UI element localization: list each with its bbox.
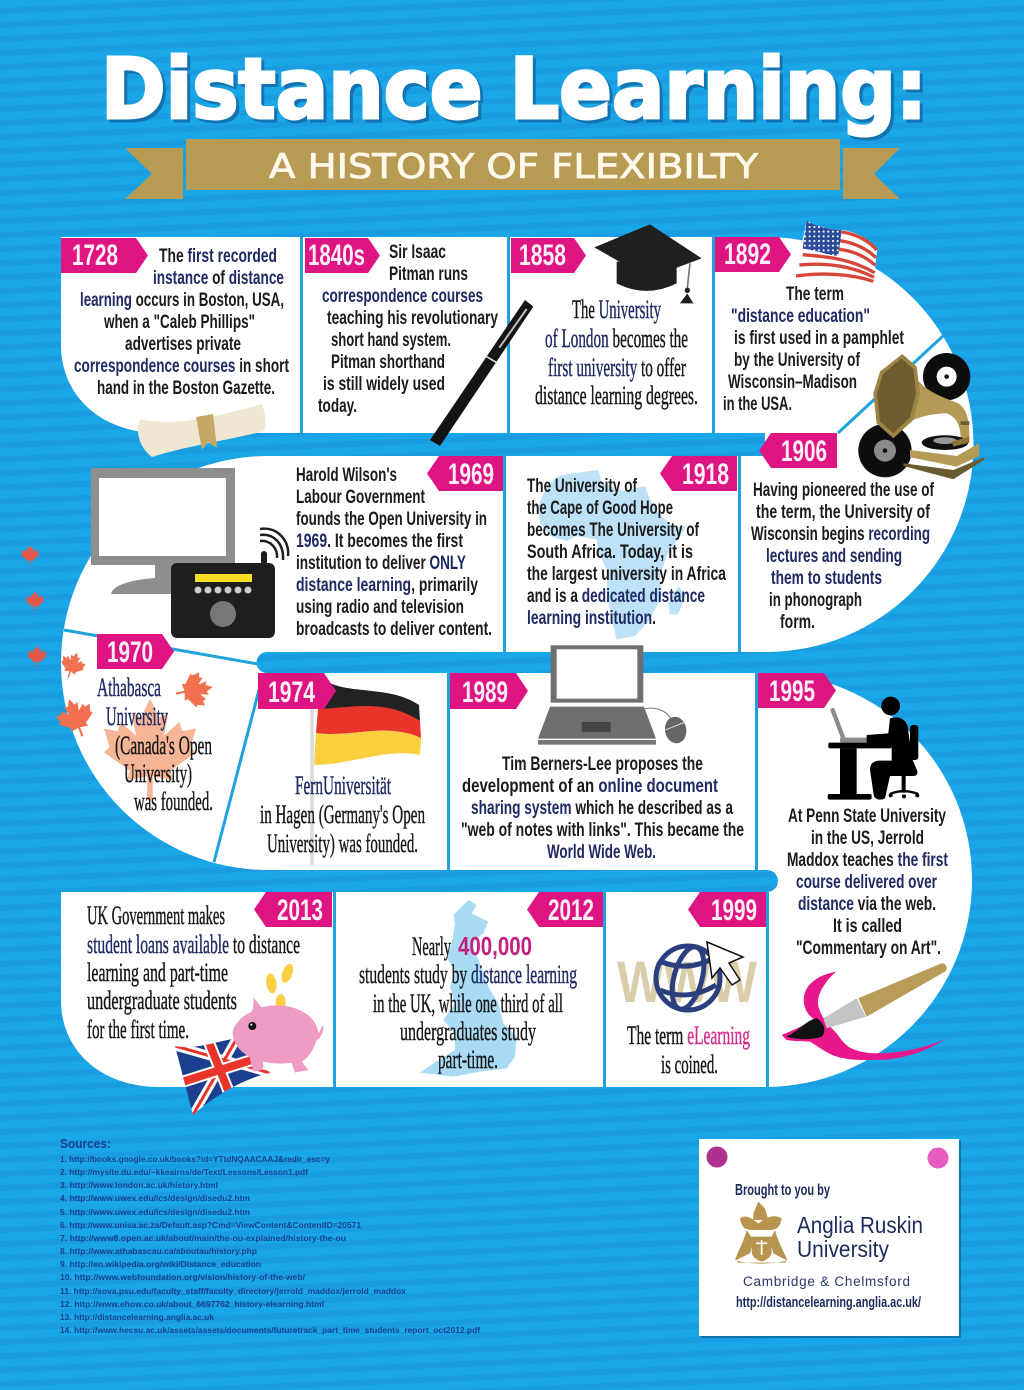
sources list: 3. http://www.london.ac.uk/history.html — [60, 1180, 218, 1190]
panel: 1728 — [61, 238, 289, 457]
icon: pen — [430, 300, 533, 446]
year tag: 1728 — [72, 239, 118, 272]
text: first university to offer — [548, 353, 686, 382]
text: distance learning degrees. — [535, 381, 698, 410]
text: in the UK, while one third of all — [373, 989, 563, 1018]
icon: piggy bank and coins — [233, 962, 323, 1073]
text: institution to deliver ONLY — [296, 553, 466, 574]
sponsor line: Brought to you by — [735, 1182, 830, 1199]
text — [296, 465, 492, 640]
text: advertises private — [125, 334, 241, 355]
text — [787, 806, 948, 959]
text: form. — [780, 612, 815, 633]
year tag: 2012 — [548, 894, 594, 927]
text: World Wide Web. — [547, 842, 656, 863]
icon: university crest — [735, 1202, 787, 1264]
text: The first recorded — [159, 246, 277, 267]
text — [260, 771, 425, 858]
text: correspondence courses in short — [74, 356, 289, 377]
text: distance learning, primarily — [296, 575, 478, 596]
text: Having pioneered the use of — [753, 480, 934, 501]
sources list: 7. http://www8.open.ac.uk/about/main/the-ou-explained/history-the-ou — [60, 1233, 346, 1243]
text: lectures and sending — [766, 546, 902, 567]
text: University — [106, 702, 168, 731]
text: in phonograph — [769, 590, 862, 611]
text: was founded. — [134, 787, 213, 816]
icon: person at desk — [828, 697, 919, 800]
text — [535, 295, 698, 410]
text: today. — [318, 396, 357, 417]
text — [87, 901, 300, 1044]
year tag: 1969 — [448, 458, 494, 491]
text: development of an online document — [462, 776, 719, 797]
text: hand in the Boston Gazette. — [97, 378, 275, 399]
text: South Africa. Today, it is — [527, 542, 693, 563]
text: in the USA. — [723, 394, 792, 415]
text — [461, 754, 744, 863]
text: the term, the University of — [756, 502, 930, 523]
icon: UK map — [420, 900, 517, 1077]
icon: US flag — [795, 221, 877, 283]
text: broadcasts to deliver content. — [296, 619, 492, 640]
year tag: 1906 — [781, 435, 827, 468]
panel: 1858 — [511, 224, 702, 410]
icon: Africa map — [538, 470, 687, 639]
text: Wisconsin begins recording — [751, 524, 930, 545]
year tag: 1974 — [268, 676, 315, 709]
panel: 1840s — [305, 238, 533, 446]
text: the largest university in Africa — [527, 564, 726, 585]
text — [74, 246, 289, 399]
sources list: 6. http://www.unisa.ac.za/Default.asp?Cmd=ViewContent&ContentID=20571 — [60, 1220, 361, 1230]
year tag — [660, 456, 737, 491]
text: learning occurs in Boston, USA, — [80, 290, 284, 311]
text: Pitman runs — [389, 264, 468, 285]
year tag: 2013 — [277, 894, 323, 927]
text: correspondence courses — [322, 286, 483, 307]
year tag: 1999 — [711, 894, 757, 927]
text: 1969. It becomes the first — [296, 531, 463, 552]
sources list — [60, 1136, 480, 1335]
year tag — [759, 433, 837, 468]
panel: 1999 — [617, 892, 766, 1079]
text: students study by distance learning — [359, 960, 577, 989]
icon: German flag — [310, 680, 421, 865]
text: them to students — [771, 568, 882, 589]
text: (Canada's Open — [115, 731, 212, 760]
panel: brought to you by note — [699, 1139, 961, 1338]
text — [751, 480, 934, 633]
text: The University — [572, 295, 661, 324]
text: Athabasca — [97, 673, 161, 702]
icon: union flag — [175, 1038, 270, 1115]
icon: graduation cap — [594, 224, 702, 303]
year tag: 1858 — [519, 239, 566, 272]
website url: http://distancelearning.anglia.ac.uk/ — [736, 1294, 922, 1311]
text: instance of distance — [153, 268, 284, 289]
panel: 1970 — [21, 545, 216, 816]
year tag — [427, 456, 503, 491]
panel: 2012 — [359, 892, 603, 1077]
panel: 1906 — [751, 353, 984, 633]
year tag — [688, 892, 766, 927]
text — [627, 1021, 750, 1079]
text: part-time. — [438, 1045, 498, 1074]
text: when a "Caleb Phillips" — [103, 312, 255, 333]
text: "Commentary on Art". — [796, 938, 941, 959]
sources list: Sources: — [60, 1136, 111, 1151]
icon: WWW globe and cursor: WWW — [617, 950, 757, 1015]
text: short hand system. — [331, 330, 451, 351]
text: undergraduate students — [87, 986, 237, 1015]
text: for the first time. — [87, 1015, 189, 1044]
year tag — [254, 892, 332, 927]
panel: 2013 — [87, 892, 332, 1115]
sources list: 10. http://www.webfoundation.org/vision/history-of-the-web/ — [60, 1272, 306, 1282]
winding white timeline path — [61, 237, 974, 1087]
panel: 1974 — [258, 673, 425, 865]
university name: University — [797, 1236, 889, 1262]
text: The term — [786, 284, 844, 305]
year tag — [527, 892, 603, 927]
text: UK Government makes — [87, 901, 225, 930]
text: learning and part-time — [87, 958, 228, 987]
sources list: 8. http://www.athabascau.ca/aboutau/history.php — [60, 1246, 257, 1256]
text: It is called — [833, 916, 902, 937]
year tag: 1989 — [462, 676, 508, 709]
panel: 1969 — [91, 456, 503, 640]
text: Pitman shorthand — [331, 352, 445, 373]
text: University) — [124, 759, 192, 788]
text: University) was founded. — [267, 829, 418, 858]
text: Harold Wilson's — [296, 465, 397, 486]
text: "distance education" — [731, 306, 870, 327]
text: Nearly — [412, 932, 451, 961]
text: in the US, Jerrold — [811, 828, 924, 849]
text: sharing system which he described as a — [471, 798, 733, 819]
text: Labour Government — [296, 487, 425, 508]
year tag: 1918 — [682, 458, 729, 491]
text — [723, 284, 904, 415]
text: Tim Berners-Lee proposes the — [502, 754, 703, 775]
icon: gramophone and records — [858, 353, 984, 479]
text: Maddox teaches the first — [787, 850, 948, 871]
text — [97, 673, 213, 816]
panel: 1995 — [758, 673, 948, 1060]
year tag: 1892 — [724, 238, 771, 271]
text: The University of — [527, 476, 637, 497]
icon: radio — [171, 529, 288, 638]
year tag: 1840s — [308, 239, 365, 272]
text — [359, 931, 577, 1074]
sources list: 2. http://mysite.du.edu/~kkeairns/de/Text/Lessons/Lesson1.pdf — [60, 1167, 308, 1177]
text: founds the Open University in — [296, 509, 487, 530]
icon: pins — [706, 1146, 948, 1168]
year tag: 1970 — [107, 636, 153, 669]
text: the Cape of Good Hope — [527, 498, 673, 519]
sources list: 11. http://sova.psu.edu/faculty_staff/faculty_directory/jerrold_maddox/jerrold_maddox — [60, 1286, 406, 1296]
text: is coined. — [661, 1050, 718, 1079]
icon: paintbrush with pink stroke — [782, 963, 947, 1060]
icon: scroll — [138, 404, 265, 457]
icon: laptop and mouse — [538, 645, 688, 745]
text: learning institution. — [527, 608, 656, 629]
text: teaching his revolutionary — [327, 308, 498, 329]
subtitle ribbon: A HISTORY OF FLEXIBILTY — [269, 147, 758, 187]
sources list: 13. http://distancelearning.anglia.ac.uk — [60, 1312, 214, 1322]
text: in Hagen (Germany's Open — [260, 800, 425, 829]
text: The term eLearning — [627, 1021, 750, 1050]
icon: maple leaves — [21, 545, 216, 800]
text: course delivered over — [796, 872, 937, 893]
sources list: 14. http://www.hecsu.ac.uk/assets/assets/documents/futuretrack_part_time_students_report_oct2012.pdf — [60, 1325, 480, 1335]
text: of London becomes the — [545, 324, 688, 353]
text: and is a dedicated distance — [527, 586, 705, 607]
sources list: 1. http://books.google.co.uk/books?id=YTtdNQAACAAJ&redir_esc=y — [60, 1154, 330, 1164]
text: using radio and television — [296, 597, 464, 618]
panel: 1892 — [715, 221, 904, 415]
university name: Anglia Ruskin — [797, 1212, 923, 1238]
text — [527, 476, 726, 629]
text: 400,000 — [458, 931, 532, 961]
text: distance via the web. — [798, 894, 936, 915]
text: student loans available to distance — [87, 930, 300, 959]
panel: 1989 — [450, 645, 744, 863]
text: undergraduates study — [400, 1017, 536, 1046]
text: Sir Isaac — [389, 242, 446, 263]
text: is first used in a pamphlet — [734, 328, 904, 349]
text: Wisconsin–Madison — [728, 372, 857, 393]
text: is still widely used — [323, 374, 445, 395]
icon: computer monitor — [91, 468, 235, 594]
text: FernUniversität — [295, 771, 391, 800]
sources list: 4. http://www.uwex.edu/ics/design/disedu2.htm — [60, 1193, 250, 1203]
text: At Penn State University — [788, 806, 946, 827]
sources list: 9. http://en.wikipedia.org/wiki/Distance_education — [60, 1259, 261, 1269]
panel: 1918 — [527, 456, 737, 639]
text: becomes The University of — [527, 520, 699, 541]
title: Distance Learning: — [101, 40, 927, 138]
subtitle ribbon — [125, 139, 900, 199]
text — [318, 242, 498, 417]
campus line: Cambridge & Chelmsford — [743, 1274, 910, 1289]
text: "web of notes with links". This became the — [461, 820, 744, 841]
text: by the University of — [734, 350, 860, 371]
sources list: 5. http://www.uwex.edu/ics/design/disedu2.htm — [60, 1207, 250, 1217]
year tag: 1995 — [769, 675, 815, 708]
university name — [797, 1212, 923, 1262]
sources list: 12. http://www.ehow.co.uk/about_6697762_history-elearning.html — [60, 1299, 324, 1309]
